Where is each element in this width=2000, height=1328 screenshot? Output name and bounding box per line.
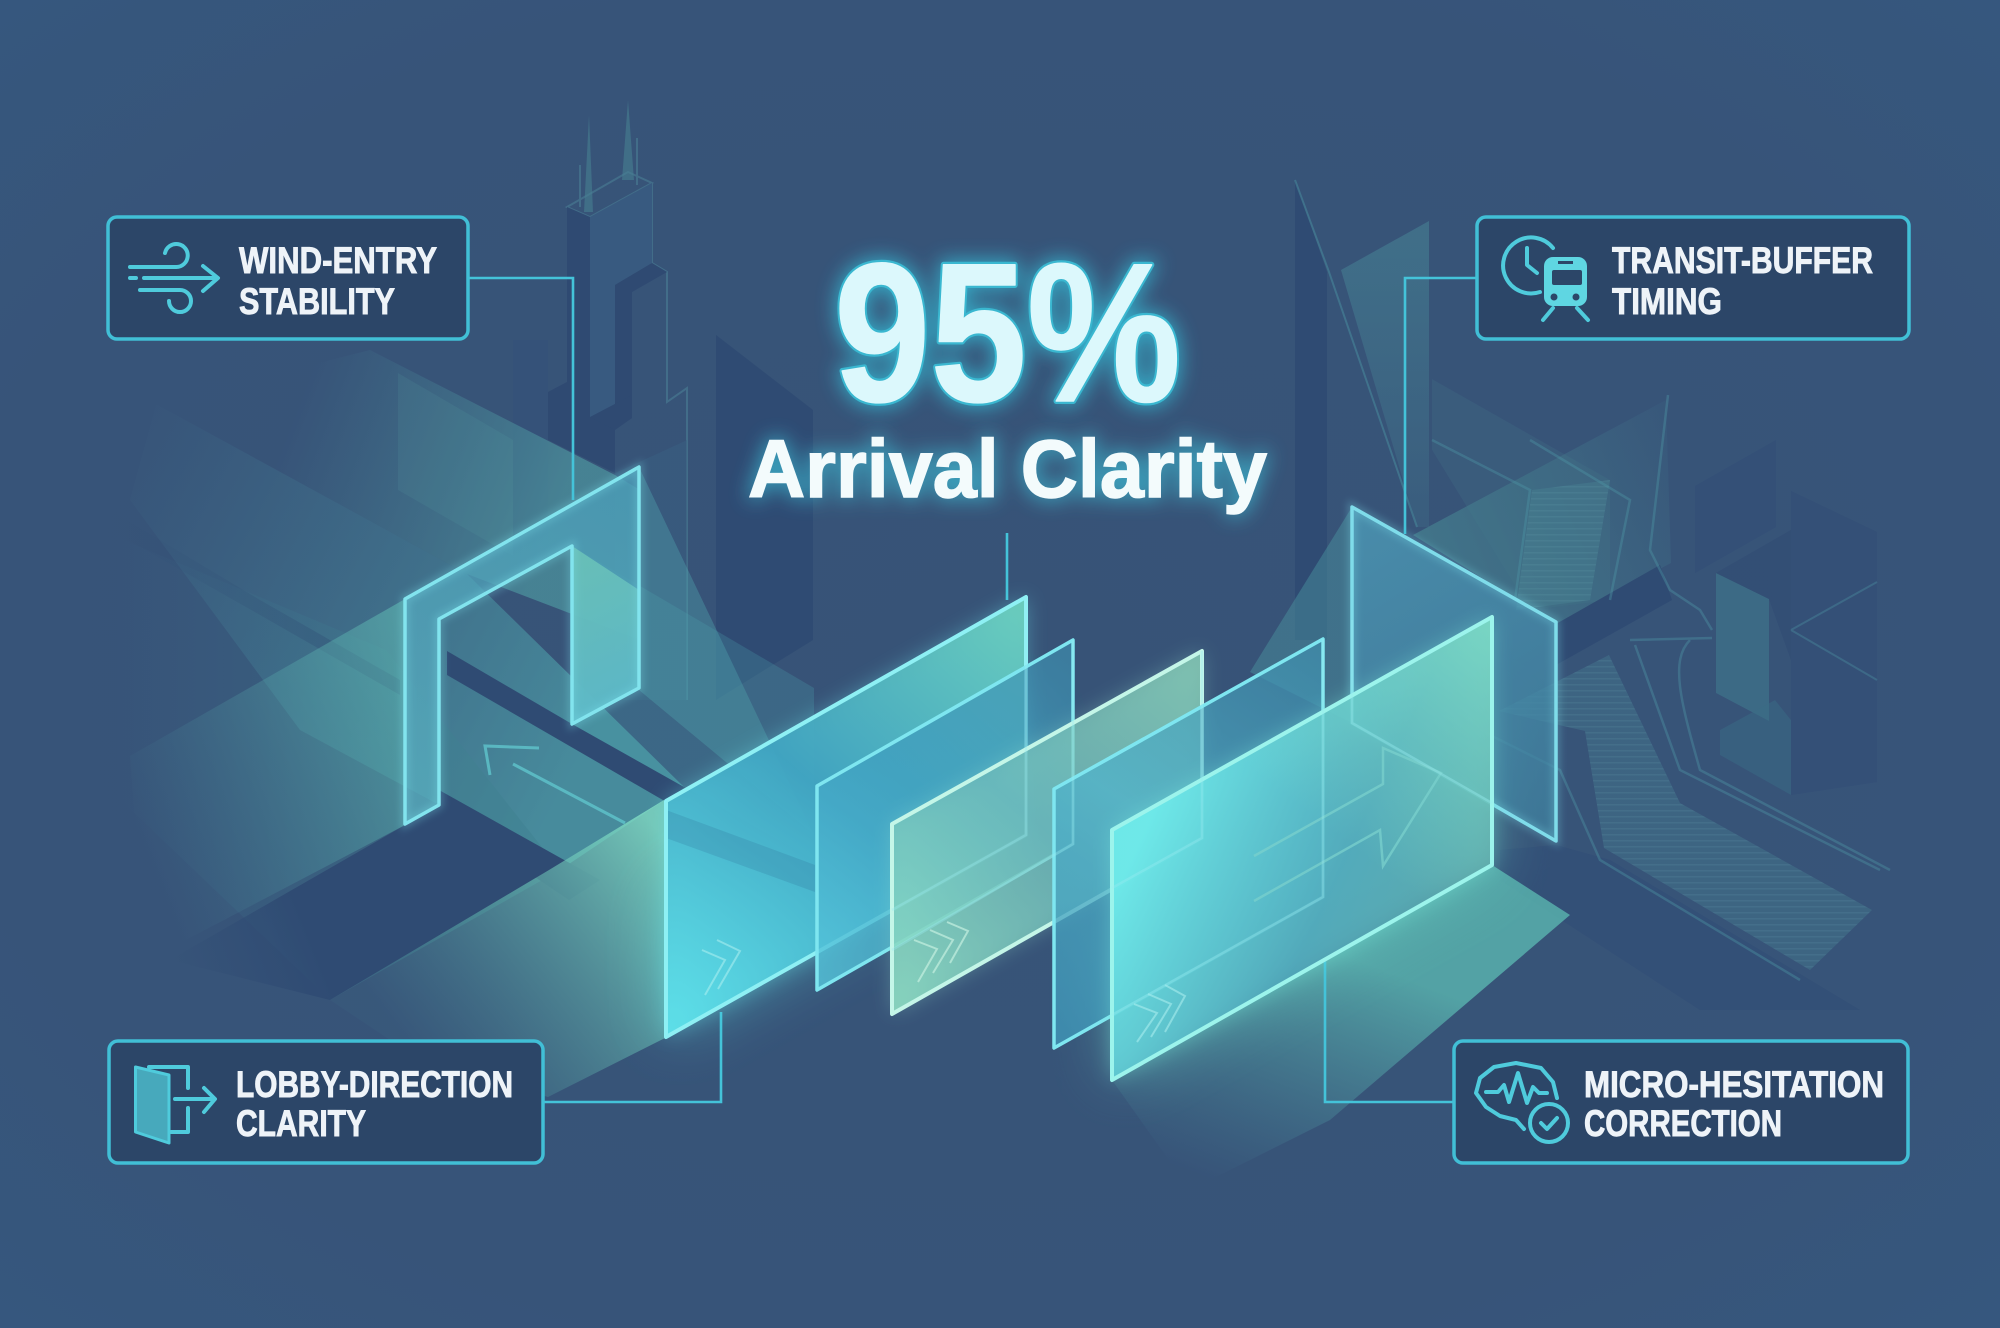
connector: micro-hesitation bbox=[1325, 960, 1454, 1102]
left light bands and road bbox=[100, 350, 814, 1097]
label: WIND-ENTRY bbox=[239, 240, 437, 281]
headline: 95%: 95% bbox=[834, 222, 1181, 443]
label: LOBBY-DIRECTION bbox=[236, 1064, 513, 1105]
label: CORRECTION bbox=[1584, 1103, 1782, 1144]
label bbox=[1584, 1064, 1884, 1144]
glass panel 5 bbox=[1112, 617, 1492, 1080]
dark building behind title bbox=[716, 335, 813, 700]
left portal frame bbox=[405, 467, 639, 824]
callout: wind-entry stability bbox=[108, 217, 468, 339]
left portal arrow bbox=[485, 746, 625, 823]
chevrons bbox=[914, 922, 968, 982]
glass panel 4 bbox=[1054, 639, 1323, 1048]
right skyline bbox=[1295, 180, 1877, 795]
right road network bbox=[1413, 379, 1890, 1010]
callout: lobby-direction clarity bbox=[109, 1041, 543, 1163]
connector: wind-entry bbox=[468, 278, 573, 500]
label bbox=[1612, 240, 1873, 322]
subheading: Arrival Clarity: Arrival Clarity bbox=[748, 424, 1267, 515]
connector: lobby-direction bbox=[543, 1012, 721, 1102]
label: TIMING bbox=[1612, 281, 1722, 322]
connector: transit-buffer bbox=[1405, 278, 1477, 534]
icon: clock and train bbox=[1503, 237, 1588, 320]
callout: transit-buffer timing bbox=[1477, 217, 1909, 339]
icon: brain with check bbox=[1476, 1063, 1568, 1142]
chevrons bbox=[1134, 985, 1185, 1042]
left skyscraper silhouette bbox=[513, 100, 687, 700]
connector: title to panels bbox=[1006, 533, 1008, 600]
right portal frame bbox=[1250, 507, 1556, 841]
callout: micro-hesitation correction bbox=[1454, 1041, 1908, 1163]
glass panel 1 bbox=[666, 597, 1026, 1037]
floor light below last panel bbox=[1112, 865, 1570, 1190]
subheading: Arrival Clarity: Arrival Clarity bbox=[748, 424, 1267, 515]
chevrons bbox=[702, 940, 740, 995]
label bbox=[239, 240, 437, 322]
glass panel 2 bbox=[817, 640, 1073, 990]
label bbox=[236, 1064, 513, 1144]
headline: 95%: 95% bbox=[834, 222, 1181, 443]
label: CLARITY bbox=[236, 1103, 366, 1144]
label: STABILITY bbox=[239, 281, 395, 322]
headline: 95%: 95% bbox=[834, 222, 1181, 443]
label: MICRO-HESITATION bbox=[1584, 1064, 1884, 1105]
large arrow bbox=[1254, 748, 1441, 901]
label: TRANSIT-BUFFER bbox=[1612, 240, 1873, 281]
icon: door with arrow bbox=[136, 1067, 215, 1143]
glass panel 3 bbox=[892, 651, 1202, 1014]
see-through panel edges bbox=[892, 597, 1492, 1015]
icon: wind bbox=[130, 244, 218, 312]
soft glow behind panels bbox=[667, 700, 1492, 1080]
